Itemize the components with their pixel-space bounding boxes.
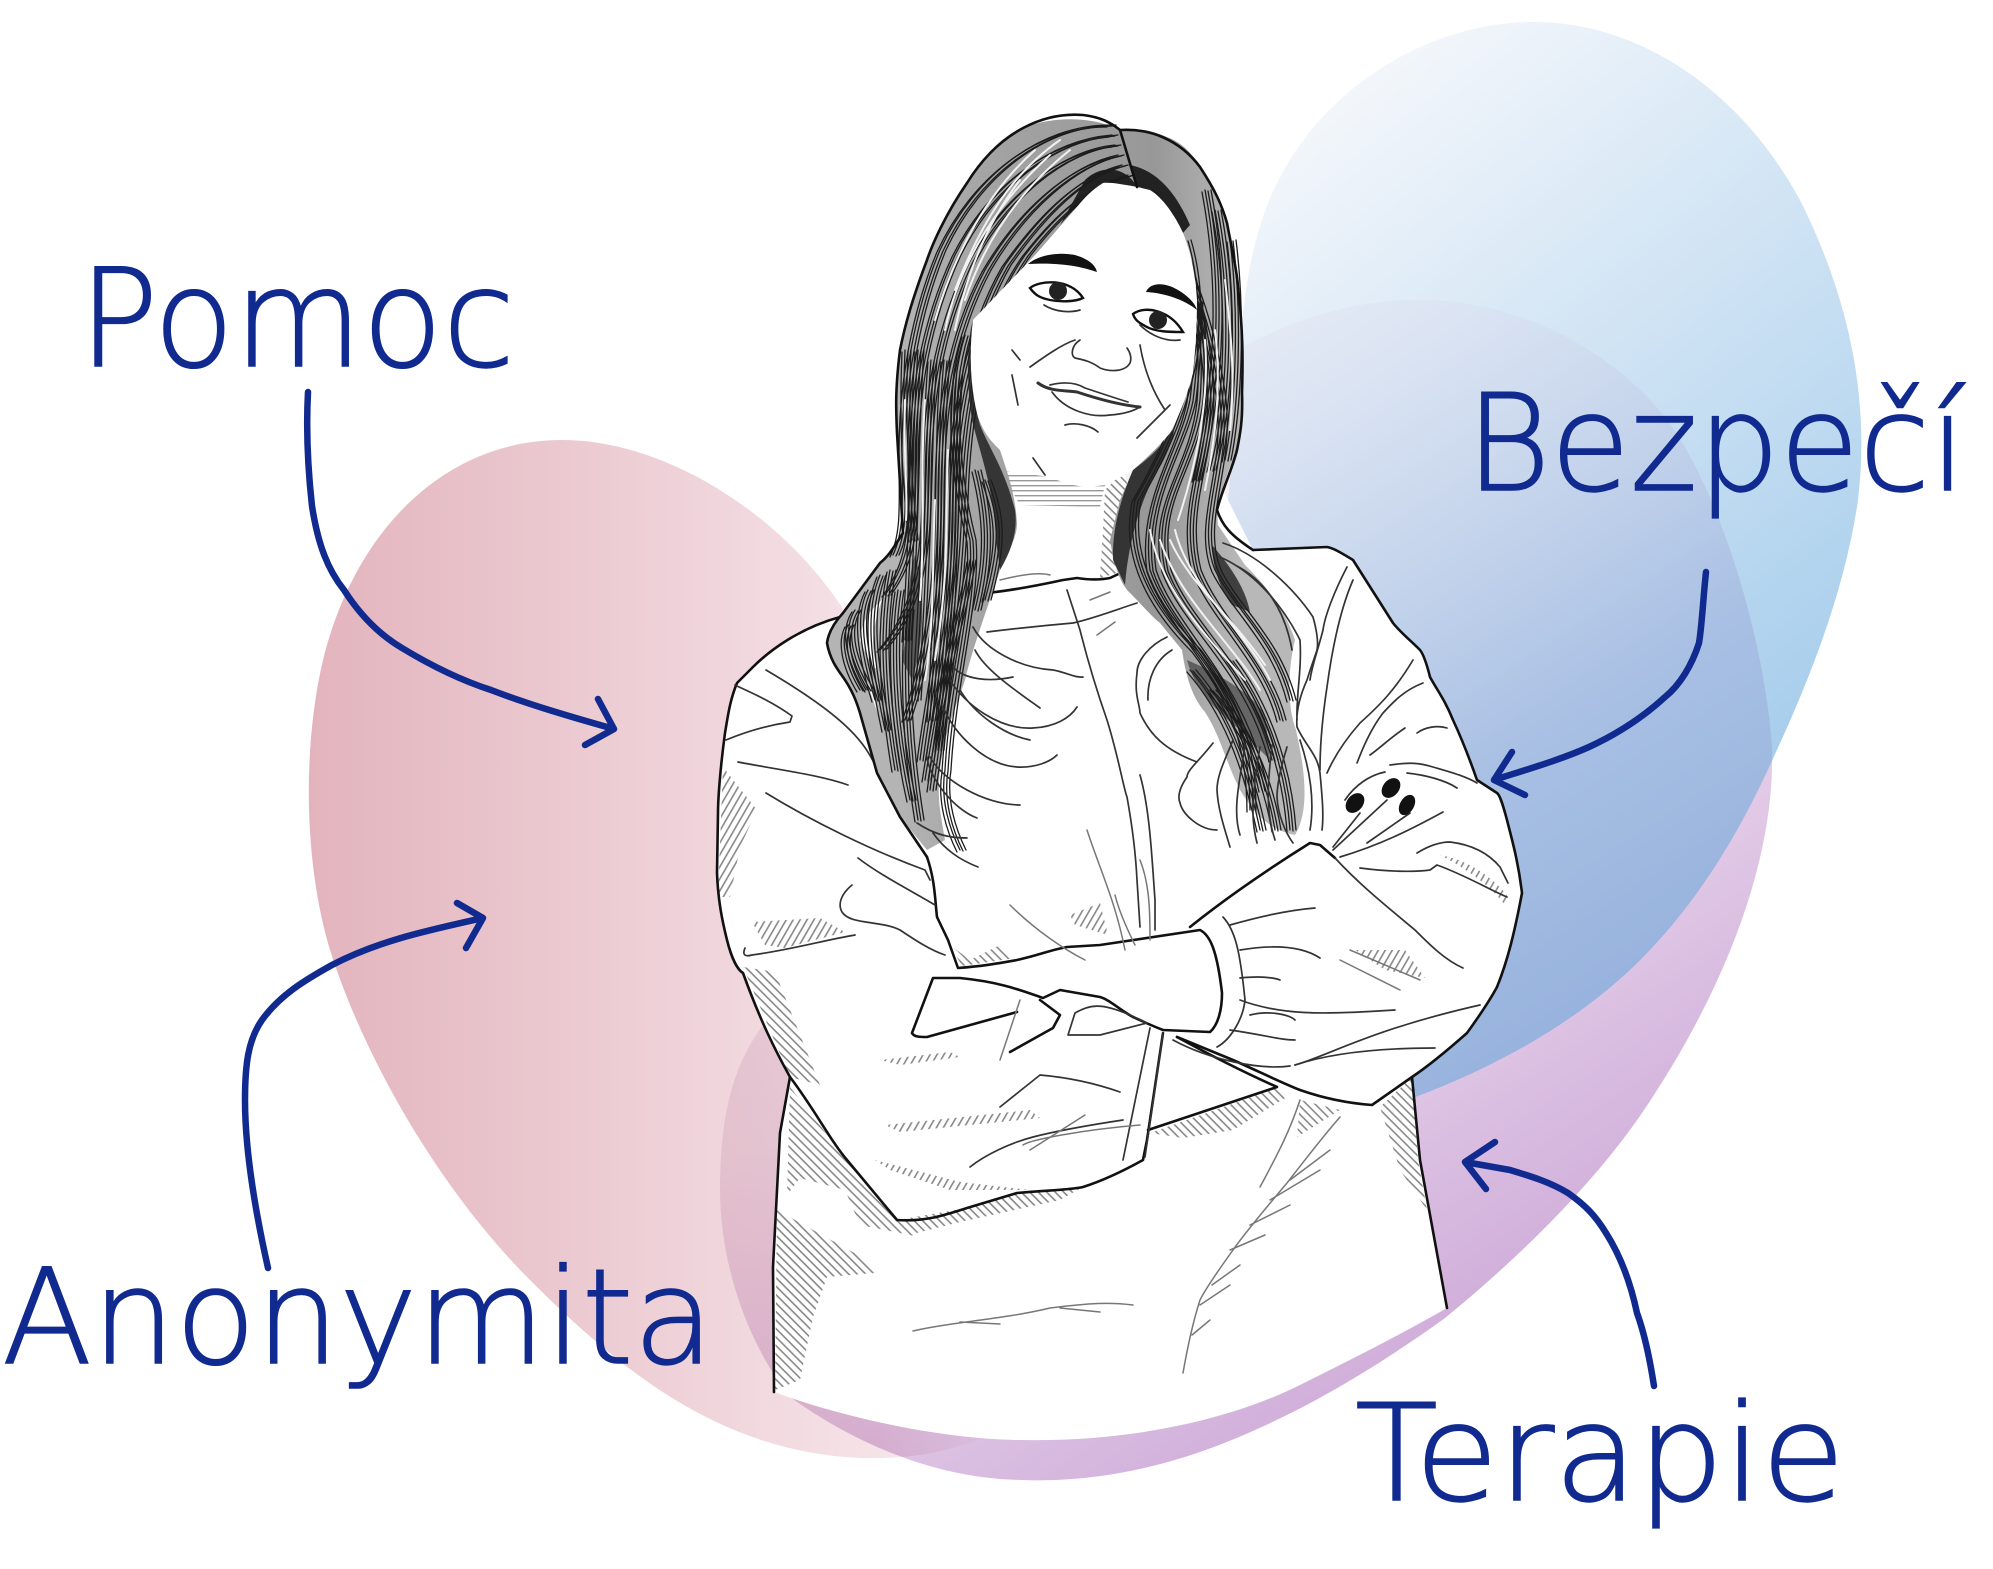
garment contour lines	[717, 547, 1522, 1392]
hair: right mass	[1110, 129, 1305, 835]
face skin	[971, 183, 1197, 487]
hair: dark strands	[841, 125, 1296, 852]
face	[971, 183, 1197, 487]
hair: white slivers	[860, 600, 882, 720]
arrow: Terapie	[1465, 1142, 1654, 1386]
hand with dark nails	[1333, 763, 1477, 857]
arrow: Pomoc	[307, 392, 614, 745]
blob: blue and purple overlap	[1229, 300, 1772, 1097]
blob: blue	[1226, 22, 1861, 1097]
garment shading hatches	[718, 470, 1507, 1390]
garment fold lines	[726, 567, 1508, 1167]
eyebrows	[1028, 254, 1197, 310]
left hair outline	[827, 533, 927, 857]
nose, mouth and facial lines	[1012, 305, 1180, 475]
illustration: woman with crossed arms	[717, 115, 1522, 1440]
arrow: Anonymita	[245, 903, 483, 1268]
label: Pomoc: Pomoc	[79, 241, 515, 399]
hair: left mass	[827, 119, 1137, 850]
fine feathering on dress	[913, 574, 1420, 1373]
body silhouette	[717, 480, 1522, 1440]
hair: light highlight strands	[905, 140, 1270, 690]
right eye	[1133, 310, 1183, 332]
hair: loose wisps	[917, 543, 1323, 867]
blob: pink	[309, 440, 1100, 1458]
hair: dark shadows	[902, 165, 1270, 760]
label: Anonymita: Anonymita	[2, 1241, 714, 1395]
arrow: Bezpečí	[1494, 572, 1706, 795]
label: Terapie: Terapie	[1355, 1376, 1845, 1532]
left eye	[1030, 282, 1083, 301]
label: Bezpečí: Bezpečí	[1466, 366, 1966, 522]
hair parting and outer contour	[896, 115, 1253, 550]
blob: purple	[720, 300, 1772, 1480]
